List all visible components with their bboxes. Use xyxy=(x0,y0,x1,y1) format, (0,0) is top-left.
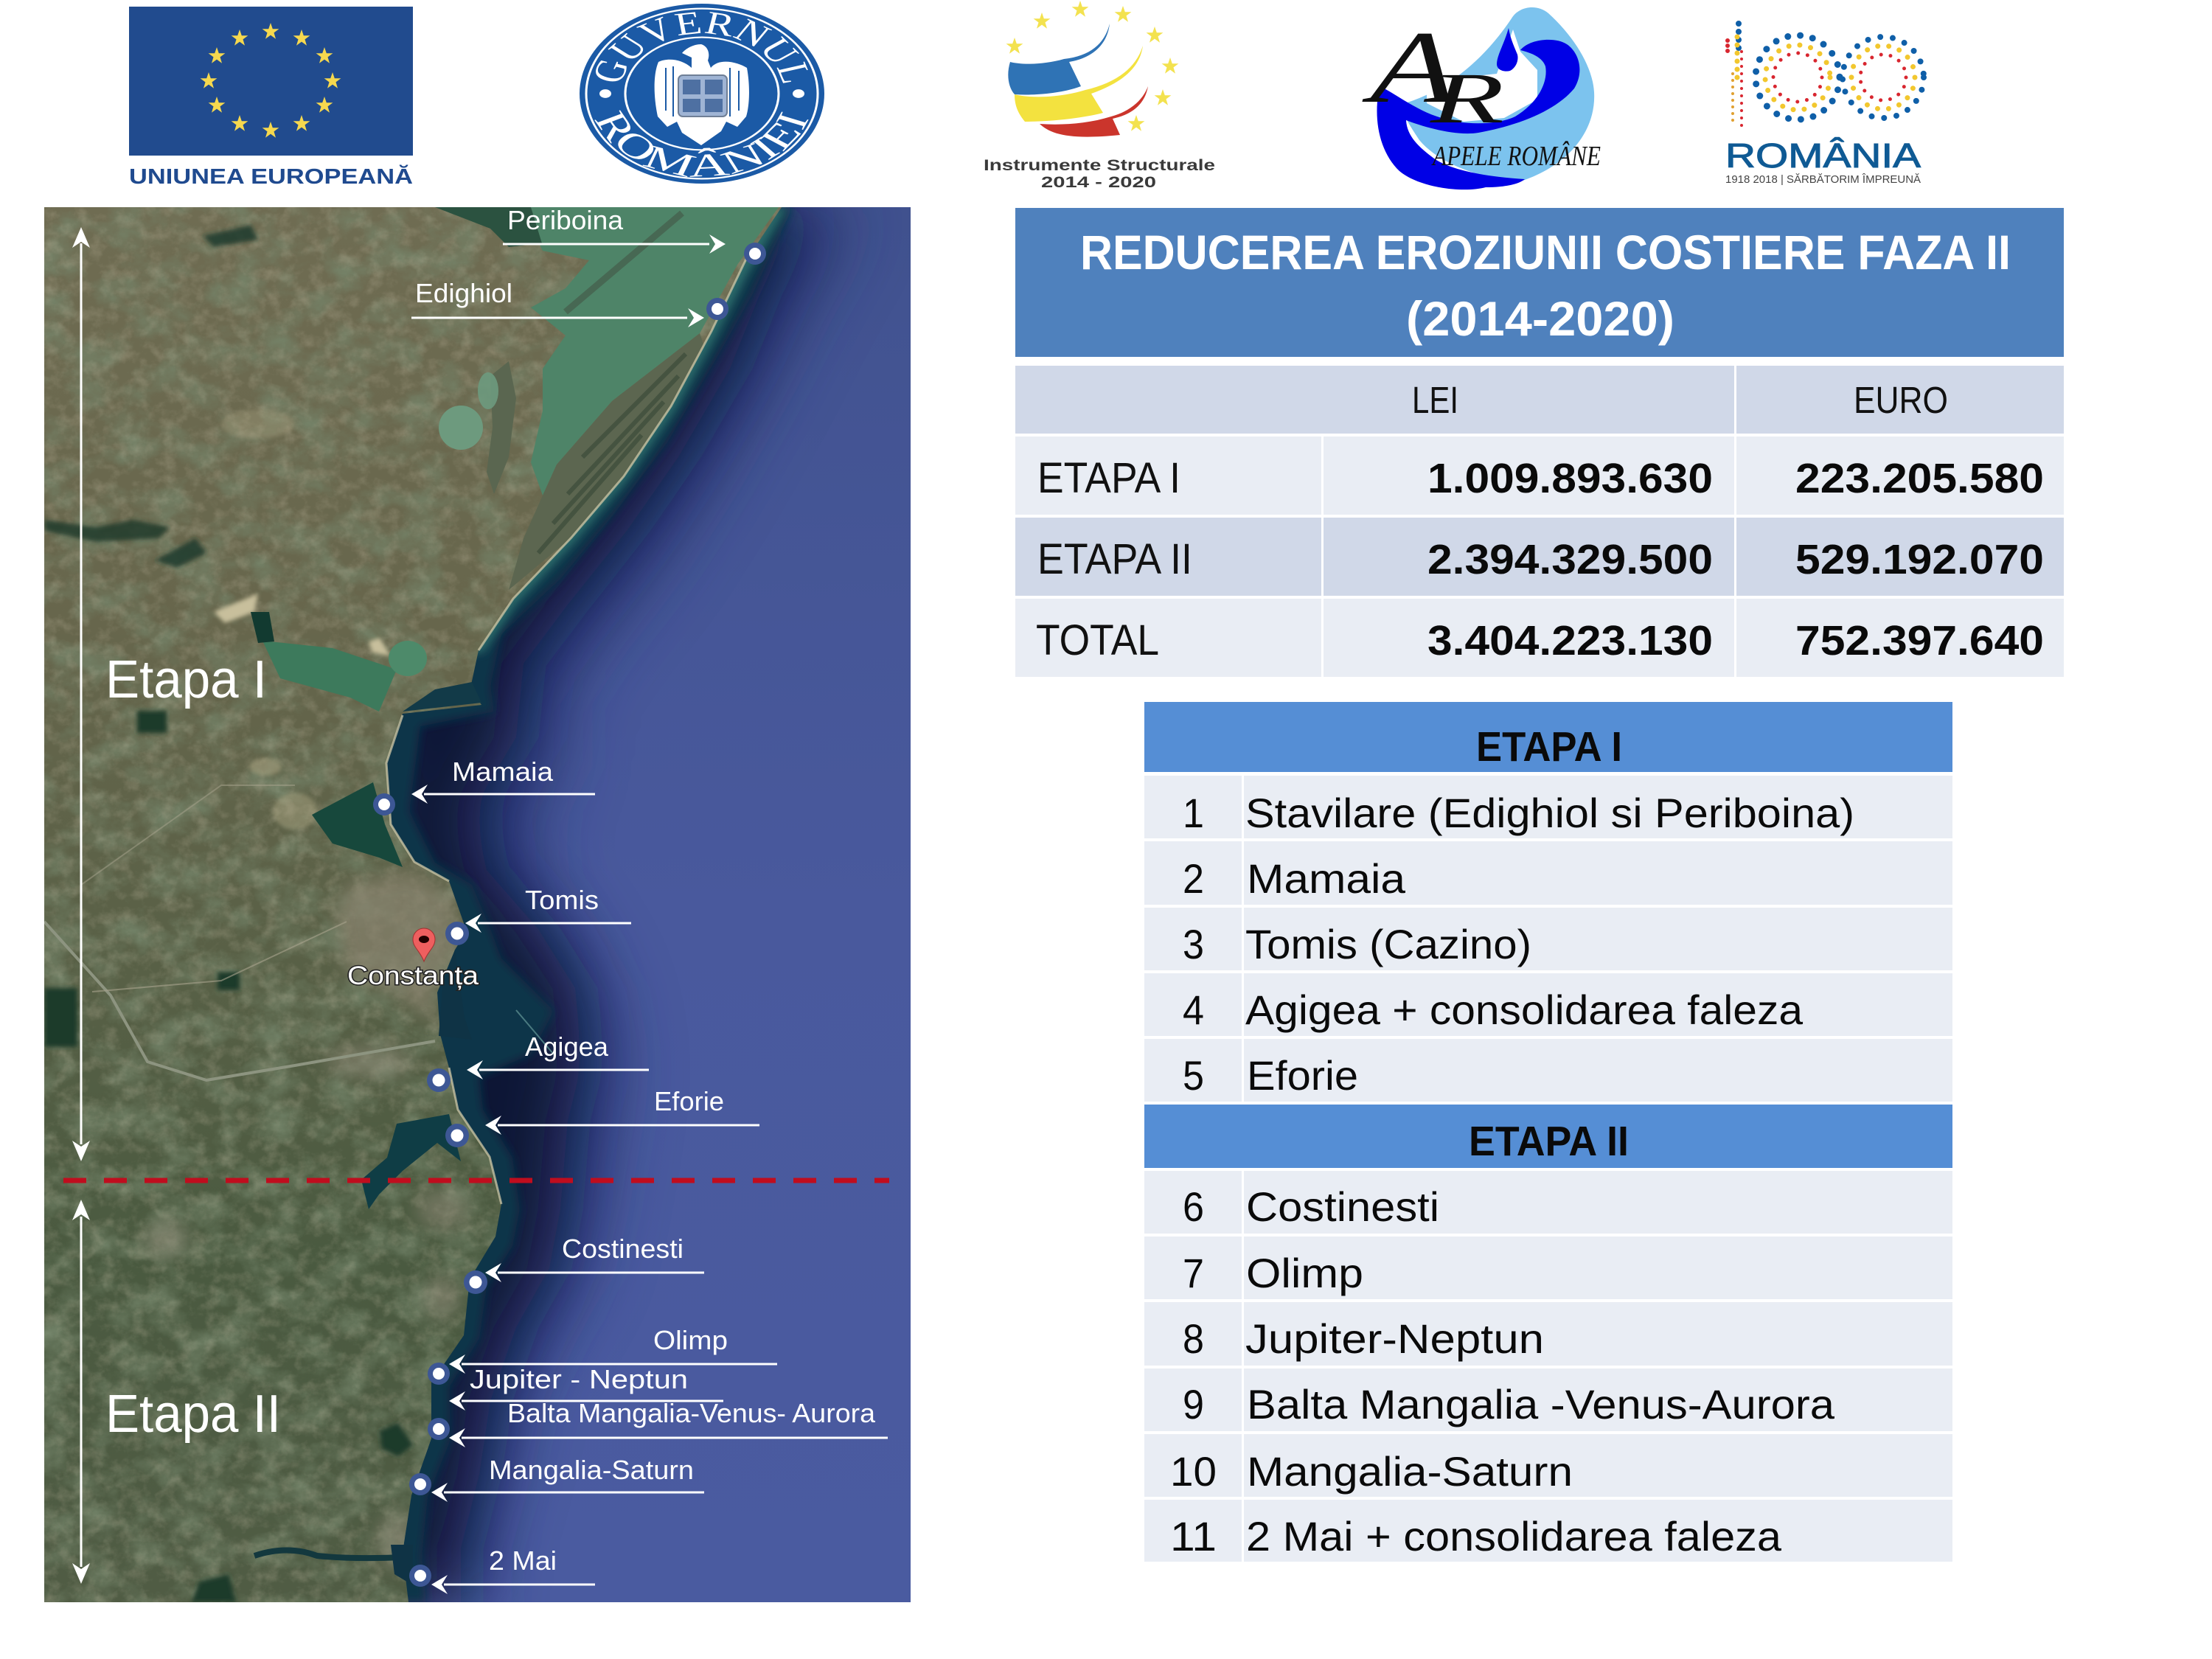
heading: Etapa I xyxy=(1144,702,1952,772)
item 11: 2 Mai + consolidarea faleza xyxy=(1246,1513,1782,1559)
item 5: Eforie xyxy=(1247,1052,1358,1099)
canal and roads xyxy=(44,785,554,1080)
item 7: Olimp xyxy=(1246,1250,1363,1296)
heading: Etapa II: ETAPA II xyxy=(1469,1118,1629,1165)
logo: Apele Romane: R xyxy=(1429,59,1504,139)
map pin: Constanta xyxy=(347,928,479,990)
logo: Instrumente Structurale xyxy=(984,1,1215,191)
item 6: 6 xyxy=(1183,1183,1204,1230)
row: Total: 3.404.223.130 xyxy=(1427,617,1713,664)
row: Etapa II: ETAPA II xyxy=(1037,535,1192,583)
item 1: 1 xyxy=(1183,790,1204,836)
item 10: Mangalia-Saturn xyxy=(1247,1448,1573,1495)
logo: Uniunea Europeana: UNIUNEA EUROPEANĂ xyxy=(129,164,413,189)
location: Edighiol xyxy=(411,278,728,327)
lagoon and lakes xyxy=(251,207,779,1585)
logo: Guvernul Romaniei xyxy=(580,4,824,184)
item 3 xyxy=(1144,908,1952,970)
item 5: 5 xyxy=(1183,1052,1204,1099)
label: Etapa II: Etapa II xyxy=(105,1385,281,1444)
row: Total: 752.397.640 xyxy=(1795,617,2044,664)
location: 2 Mai: 2 Mai xyxy=(489,1545,557,1576)
item 3: 3 xyxy=(1183,921,1204,967)
location: Mamaia: Mamaia xyxy=(452,757,554,787)
item 3: Tomis (Cazino) xyxy=(1245,921,1531,967)
location: Jupiter - Neptun xyxy=(449,1364,723,1411)
item 2: 2 xyxy=(1183,855,1204,902)
beach line xyxy=(386,254,748,1204)
row: Etapa I: ETAPA I xyxy=(1037,454,1180,502)
item 2 xyxy=(1144,841,1952,905)
location: 2 Mai xyxy=(409,1545,595,1594)
logo: Guvernul Romaniei: ROMÂNIEI xyxy=(594,110,808,177)
location: Mamaia xyxy=(373,757,595,815)
table header row: EURO xyxy=(1854,379,1948,421)
item 4 xyxy=(1144,973,1952,1036)
item 8: Jupiter-Neptun xyxy=(1245,1315,1544,1362)
logo: Romania 100 xyxy=(1725,24,1924,186)
item 5 xyxy=(1144,1039,1952,1102)
panel: cost title banner: (2014-2020) xyxy=(1406,291,1674,346)
divider: stage boundary xyxy=(63,1178,889,1183)
row: Etapa II xyxy=(1015,518,2064,596)
location: Tomis xyxy=(445,885,631,945)
item 8: 8 xyxy=(1183,1315,1204,1362)
location: Mangalia-Saturn xyxy=(409,1455,704,1502)
table: costs by stage xyxy=(1015,366,2064,677)
logo: Apele Romane xyxy=(1362,7,1601,189)
item 10: 10 xyxy=(1170,1448,1217,1495)
logo: Apele Romane: APELE ROMÂNE xyxy=(1431,141,1601,172)
row: Etapa I: 223.205.580 xyxy=(1795,455,2044,502)
item 4: Agigea + consolidarea faleza xyxy=(1245,987,1804,1033)
item 10 xyxy=(1144,1434,1952,1497)
location: Olimp xyxy=(428,1325,777,1385)
item 11: 11 xyxy=(1170,1513,1217,1559)
row: Total xyxy=(1015,599,2064,677)
logo: Instrumente Structurale: 2014 - 2020 xyxy=(1041,174,1156,191)
logo: Uniunea Europeana xyxy=(129,7,413,189)
table: list of works xyxy=(1144,702,1952,1562)
arrow: Etapa II extent xyxy=(72,1200,90,1584)
row: Etapa I: 1.009.893.630 xyxy=(1427,455,1713,502)
location: Balta Mangalia-Venus-Aurora xyxy=(428,1398,888,1447)
logo: Apele Romane: A xyxy=(1362,10,1458,125)
heading: Etapa I: ETAPA I xyxy=(1476,723,1622,771)
location: Edighiol: Edighiol xyxy=(415,278,512,308)
location: Costinesti xyxy=(464,1234,704,1294)
logo: Instrumente Structurale: Instrumente Structurale xyxy=(984,157,1215,174)
item 2: Mamaia xyxy=(1247,855,1406,902)
location: Mangalia-Saturn: Mangalia-Saturn xyxy=(489,1455,694,1485)
item 7: 7 xyxy=(1183,1250,1204,1296)
location: Costinesti: Costinesti xyxy=(562,1234,684,1264)
item 9 xyxy=(1144,1368,1952,1431)
row: Total: TOTAL xyxy=(1036,616,1159,664)
location: Eforie xyxy=(445,1086,759,1147)
row: Etapa I xyxy=(1015,437,2064,515)
logo: Romania 100: 1918 2018 | SĂRBĂTORIM ÎMPREUNĂ xyxy=(1725,173,1921,186)
item 1: Stavilare (Edighiol si Periboina) xyxy=(1245,790,1854,836)
location: Periboina: Periboina xyxy=(507,205,624,235)
dark valleys and forests xyxy=(44,225,413,1602)
panel: cost title banner: REDUCEREA EROZIUNII COSTIERE FAZA II xyxy=(1080,225,2011,279)
label: Etapa I: Etapa I xyxy=(105,650,267,709)
land xyxy=(44,207,782,1602)
location: Periboina xyxy=(503,205,766,265)
logos row xyxy=(129,1,1927,191)
item 9: 9 xyxy=(1183,1381,1204,1427)
logo: Guvernul Romaniei: GUVERNUL xyxy=(596,12,808,83)
panel: satellite map of the coast xyxy=(44,205,911,1602)
location: Eforie: Eforie xyxy=(654,1086,724,1116)
panel: cost title banner xyxy=(1015,208,2064,357)
map pin: Constanta: Constanța xyxy=(347,961,479,990)
item 6 xyxy=(1144,1171,1952,1234)
table header row: LEI xyxy=(1412,379,1458,421)
item 11 xyxy=(1144,1500,1952,1562)
heading: Etapa II xyxy=(1144,1105,1952,1168)
sea xyxy=(386,207,911,1602)
location: Olimp: Olimp xyxy=(653,1325,728,1355)
item 9: Balta Mangalia -Venus-Aurora xyxy=(1247,1381,1835,1427)
location: Tomis: Tomis xyxy=(525,885,599,915)
southern towns xyxy=(144,1046,468,1571)
item 8 xyxy=(1144,1302,1952,1366)
location: Jupiter - Neptun: Jupiter - Neptun xyxy=(470,1364,688,1394)
item 6: Costinesti xyxy=(1246,1183,1439,1230)
table header row xyxy=(1015,366,2064,434)
item 1 xyxy=(1144,776,1952,838)
Constanta urban area xyxy=(335,870,461,1025)
location: Agigea: Agigea xyxy=(525,1032,609,1062)
row: Etapa II: 2.394.329.500 xyxy=(1427,536,1713,583)
location: Balta Mangalia-Venus-Aurora: Balta Mangalia-Venus- Aurora xyxy=(507,1398,876,1428)
light soil patches xyxy=(214,409,391,830)
item 7 xyxy=(1144,1237,1952,1299)
item 4: 4 xyxy=(1183,987,1204,1033)
row: Etapa II: 529.192.070 xyxy=(1795,536,2044,583)
location: Agigea xyxy=(427,1032,649,1092)
arrow: Etapa I extent xyxy=(72,227,90,1161)
logo: Romania 100: ROMÂNIA xyxy=(1725,136,1921,175)
